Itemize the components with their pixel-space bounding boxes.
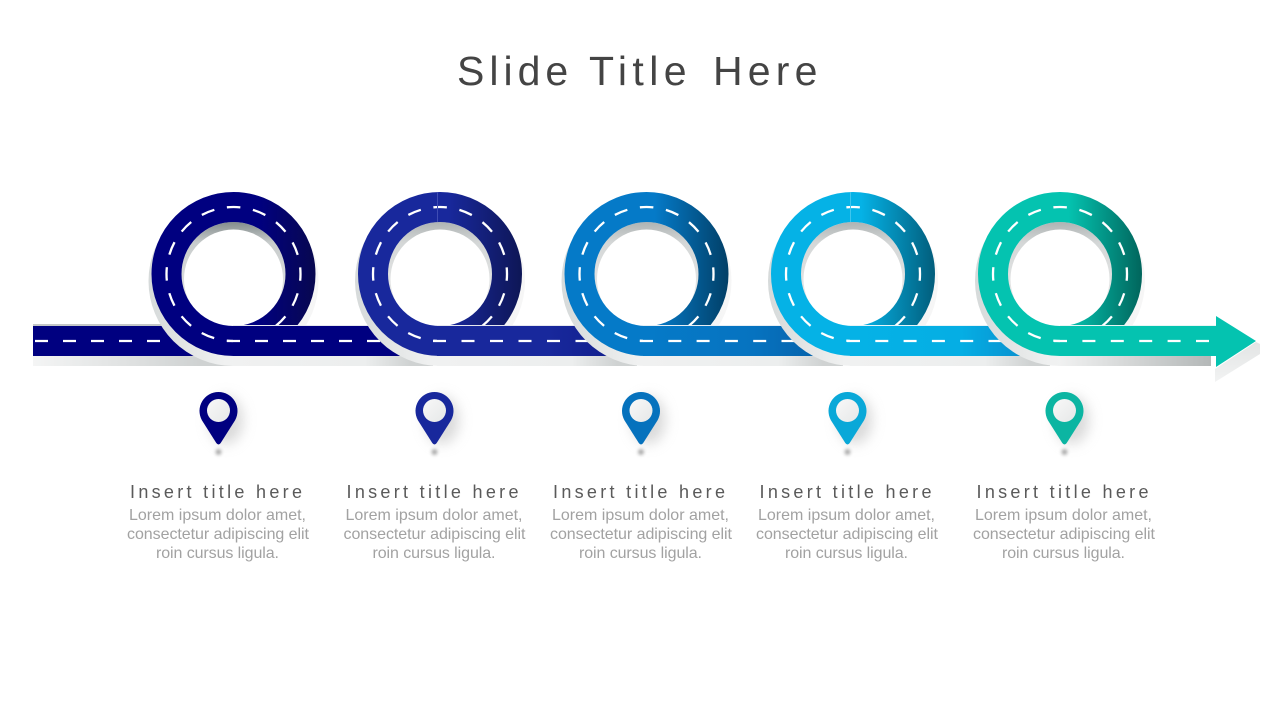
text block 5: Lorem ipsum dolor amet, [975,507,1152,524]
icon: pin 3 [622,392,666,455]
icon: pin 2 [415,392,459,455]
icon: pin 1 [200,392,243,455]
text block 1 [127,482,310,562]
text block 4: roin cursus ligula. [785,545,908,562]
title: Title [589,48,692,94]
text block 1: roin cursus ligula. [156,545,279,562]
text block 1: Insert title here [130,482,302,502]
text block 4 [756,482,939,562]
text block 5 [973,482,1156,562]
text block 3: Lorem ipsum dolor amet, [552,507,729,524]
road segment 2 [433,325,637,366]
text block 2 [344,482,526,562]
text block 1: consectetur adipiscing elit [127,526,310,543]
loop 3 [562,196,732,366]
text block 2: Insert title here [346,482,518,502]
title: Here [713,48,823,94]
road graphic [33,192,1260,382]
loop 5 [975,196,1145,366]
text block 2: roin cursus ligula. [372,545,496,562]
arrow: final road segment [1054,316,1260,382]
text block 2: Lorem ipsum dolor amet, [346,507,522,524]
title: Slide [457,48,573,94]
text block 3 [550,482,733,562]
road segment 3 [640,325,843,366]
text block 4: Lorem ipsum dolor amet, [758,507,935,524]
loop 2 [355,192,525,366]
road segment 1 [227,325,433,366]
road segment 4 [847,325,1050,366]
text block 4: consectetur adipiscing elit [756,526,939,543]
loop 1 [148,196,318,366]
text block 2: consectetur adipiscing elit [344,526,526,543]
text block 3: Insert title here [553,482,725,502]
icon: pin 4 [828,392,872,455]
text block 4: Insert title here [760,482,932,502]
text block 5: roin cursus ligula. [1002,545,1125,562]
text block 1: Lorem ipsum dolor amet, [129,507,306,524]
text block 3: roin cursus ligula. [579,545,702,562]
road segment: start [33,324,233,366]
icon: pin 5 [1046,392,1089,455]
loop 4 [768,192,938,366]
text block 5: Insert title here [976,482,1148,502]
text block 5: consectetur adipiscing elit [973,526,1156,543]
text block 3: consectetur adipiscing elit [550,526,733,543]
